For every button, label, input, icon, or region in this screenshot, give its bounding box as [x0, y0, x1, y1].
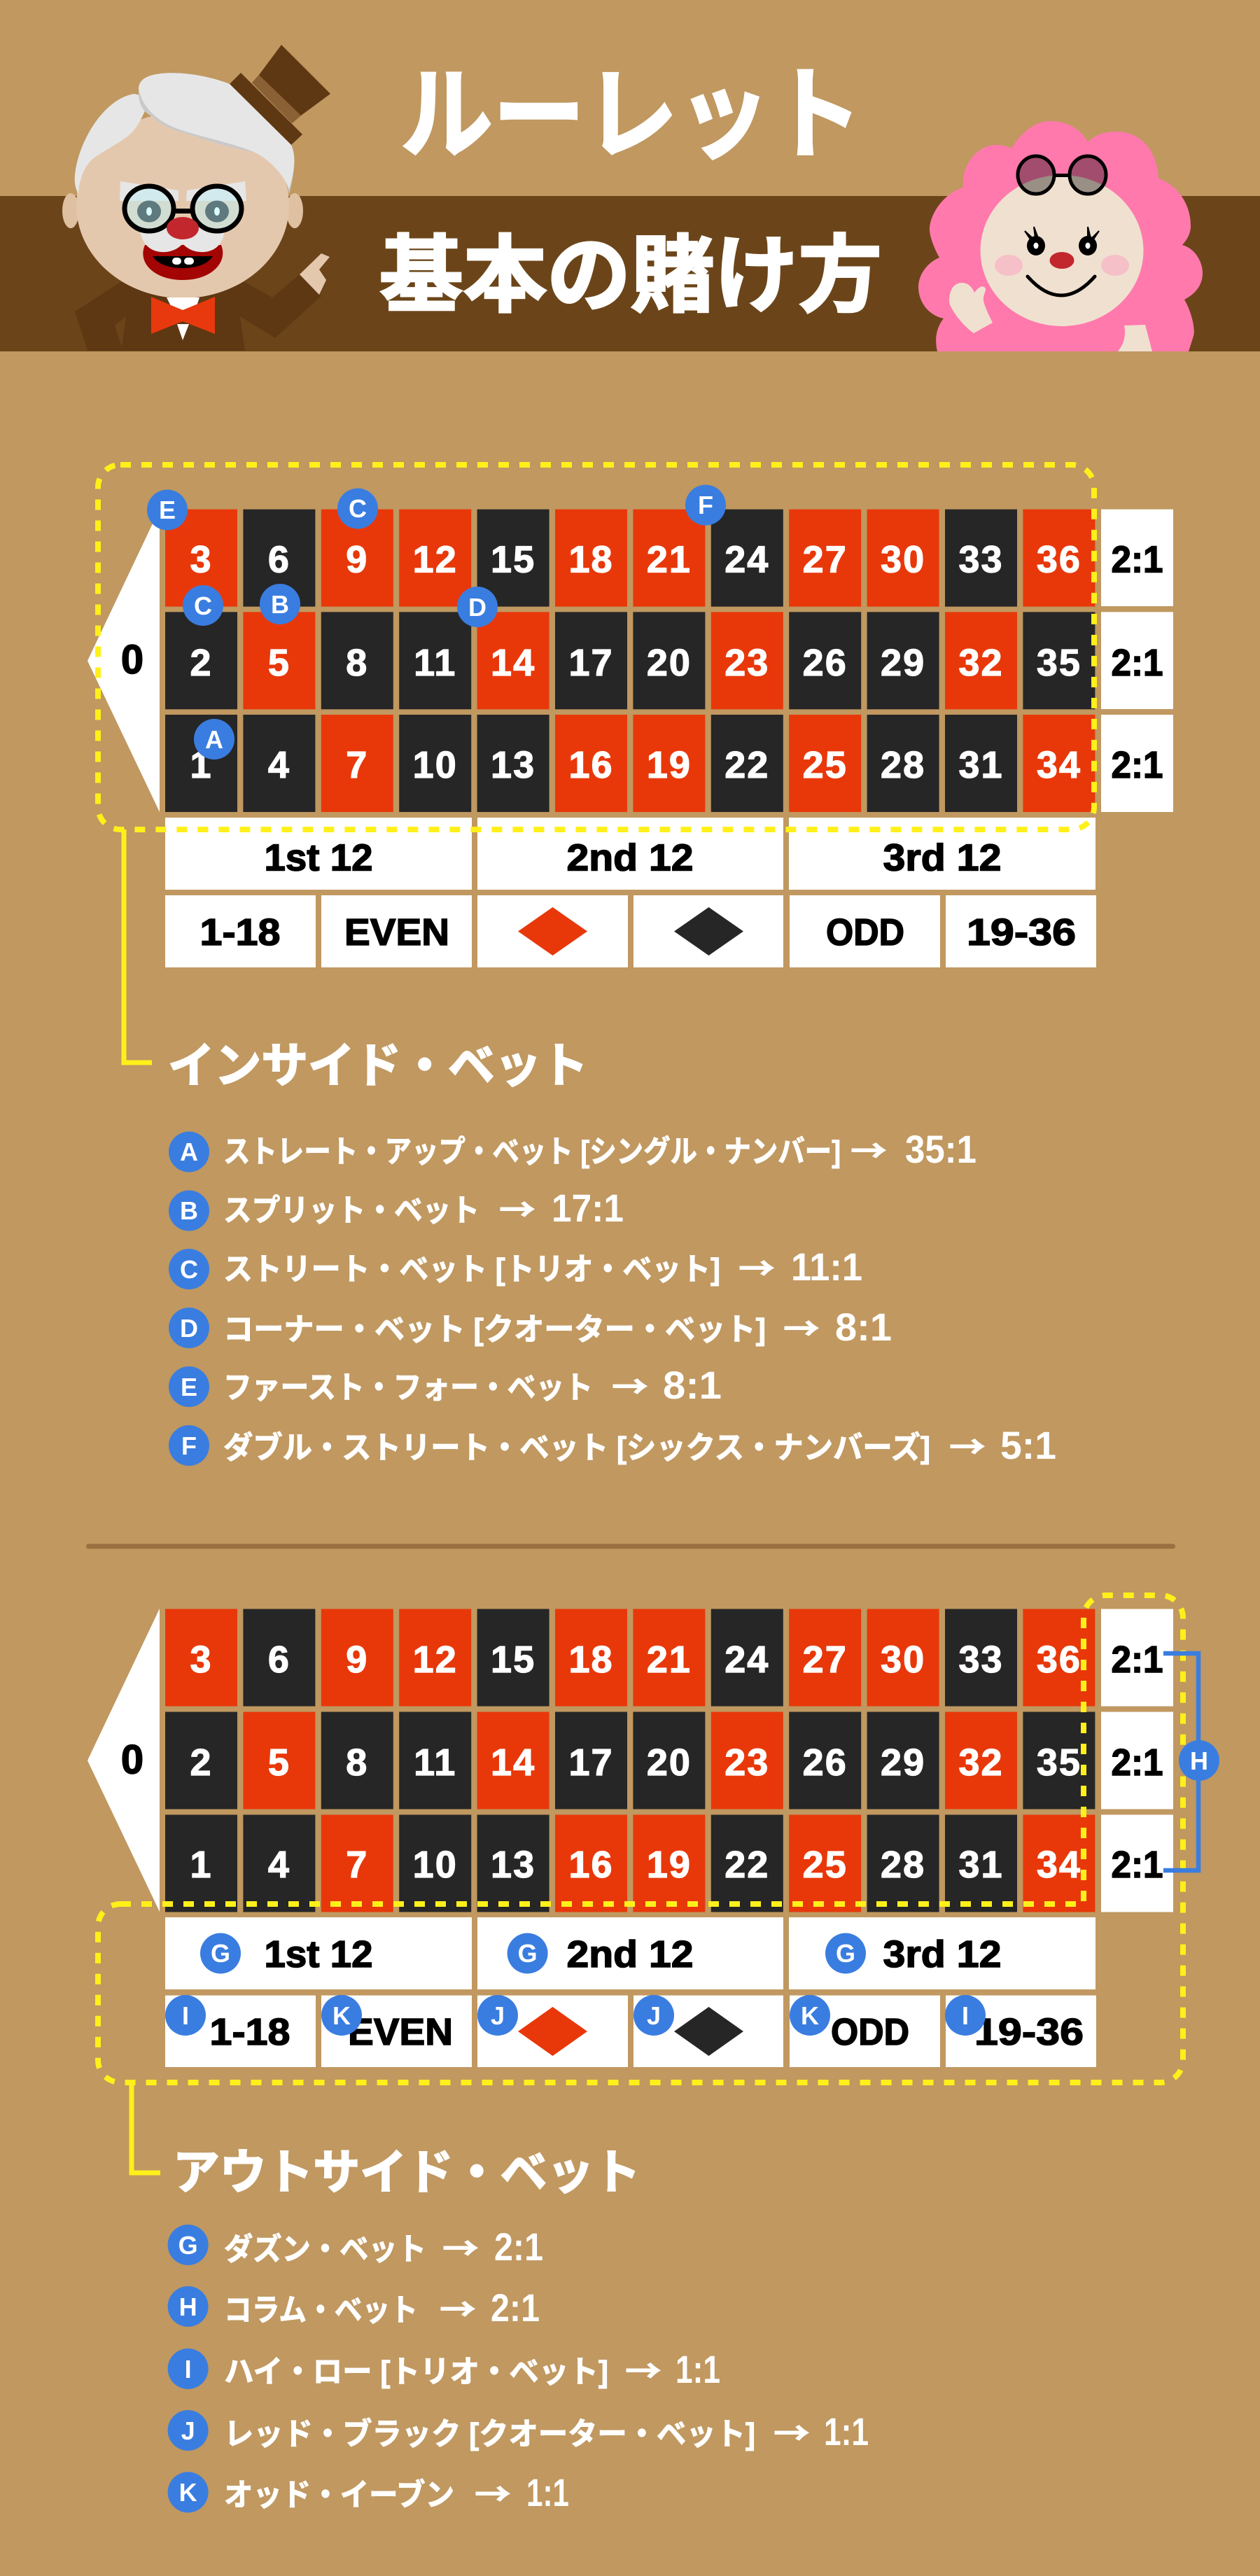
- number grid: 22: [724, 1844, 769, 1886]
- number grid: 28: [881, 1844, 925, 1886]
- connector: outside bets: [132, 2082, 160, 2173]
- number grid: 20: [647, 1742, 692, 1784]
- list: inside bets: ストレート・アップ・ベット [シングル・ナンバー]: [223, 1135, 841, 1169]
- markers on outside table: G: [836, 1939, 855, 1968]
- dozen cells: 3rd 12: [883, 1933, 1001, 1975]
- number grid: 22: [724, 744, 769, 786]
- number grid: 1: [190, 1844, 213, 1886]
- markers on outside table: K: [332, 2001, 351, 2030]
- character: old man with hat: [62, 45, 330, 351]
- list: outside bets: コラム・ベット: [224, 2293, 418, 2328]
- number grid: 9: [346, 539, 368, 581]
- list: outside bets: →: [475, 2470, 511, 2514]
- number grid: 8: [346, 642, 368, 684]
- number grid: 20: [647, 642, 692, 684]
- number grid: 34: [1037, 1844, 1082, 1886]
- number grid: 17: [568, 642, 614, 684]
- number grid: 28: [881, 744, 925, 786]
- title: ルーレット: [400, 59, 862, 172]
- number grid: 19: [647, 1844, 692, 1886]
- number grid: 8: [346, 1742, 368, 1784]
- number grid: 3: [190, 1639, 213, 1681]
- number grid: 29: [881, 1742, 925, 1784]
- number grid: 4: [268, 744, 290, 786]
- number grid: 16: [568, 744, 614, 786]
- even-money cells: EVEN: [348, 2011, 453, 2053]
- list: inside bets: コーナー・ベット [クオーター・ベット]: [223, 1312, 766, 1347]
- list: outside bets: 2:1: [491, 2286, 540, 2330]
- markers on outside table: J: [647, 2001, 661, 2030]
- number grid: 7: [346, 744, 368, 786]
- number grid: 4: [268, 1844, 290, 1886]
- number grid: 25: [803, 744, 848, 786]
- dozen cells: 1st 12: [265, 837, 372, 879]
- number grid: 26: [803, 1742, 848, 1784]
- markers on inside table: E: [159, 496, 176, 524]
- number grid: 6: [268, 539, 290, 581]
- heading: outside bets: アウトサイド・ベット: [173, 2146, 640, 2199]
- list: outside bets: 1:1: [824, 2409, 869, 2454]
- number grid: 12: [413, 539, 458, 581]
- number grid: 32: [958, 642, 1004, 684]
- list: outside bets: H: [179, 2292, 197, 2321]
- list: outside bets: K: [179, 2478, 197, 2507]
- connector: inside bets: [124, 830, 152, 1063]
- column payout cells: [1101, 510, 1173, 812]
- list: outside bets: レッド・ブラック [クオーター・ベット]: [224, 2417, 755, 2451]
- number grid: 13: [491, 1844, 536, 1886]
- markers on inside table: C: [194, 592, 212, 620]
- number grid: 27: [803, 1639, 848, 1681]
- list: inside bets: スプリット・ベット: [223, 1194, 479, 1228]
- markers on outside table: G: [518, 1939, 538, 1968]
- column payout cells: 2:1: [1112, 1844, 1163, 1886]
- number grid: 18: [568, 1639, 614, 1681]
- even-money cells: EVEN: [344, 911, 449, 953]
- dozen cells: [165, 818, 1096, 890]
- list: outside bets: →: [774, 2409, 810, 2454]
- list: inside bets: B: [180, 1196, 198, 1225]
- number grid: 12: [413, 1639, 458, 1681]
- markers on inside table: F: [698, 491, 713, 519]
- number grid: 15: [491, 1639, 536, 1681]
- even-money cells: [165, 895, 1096, 967]
- list: outside bets: 1:1: [676, 2347, 720, 2391]
- number grid: 21: [647, 539, 692, 581]
- dashed outline: outside bets: [98, 1595, 1183, 2082]
- markers on outside table: H: [1190, 1746, 1208, 1775]
- heading: inside bets: インサイド・ベット: [168, 1040, 588, 1093]
- number grid: 10: [413, 744, 458, 786]
- number grid: [165, 1609, 1095, 1912]
- markers on outside table: G: [211, 1939, 230, 1968]
- list: inside bets: 8:1: [663, 1363, 722, 1407]
- zero cell: 0: [121, 1737, 144, 1782]
- number grid: 13: [491, 744, 536, 786]
- markers on outside table: J: [491, 2001, 505, 2030]
- even-money cells: ODD: [826, 911, 904, 953]
- markers on inside table: A: [205, 725, 223, 754]
- number grid: 17: [568, 1742, 614, 1784]
- list: inside bets: ダブル・ストリート・ベット [シックス・ナンバーズ]: [223, 1431, 930, 1465]
- number grid: 36: [1037, 539, 1082, 581]
- number grid: 31: [958, 744, 1004, 786]
- number grid: 16: [568, 1844, 614, 1886]
- number grid: 14: [491, 642, 536, 684]
- list: inside bets: 17:1: [552, 1186, 624, 1230]
- number grid: 10: [413, 1844, 458, 1886]
- list: outside bets: →: [440, 2285, 476, 2330]
- number grid: 23: [724, 1742, 769, 1784]
- list: inside bets: →: [499, 1185, 536, 1230]
- dozen cells: 2nd 12: [567, 1933, 693, 1975]
- markers on inside table: C: [349, 494, 367, 523]
- markers on inside table: [147, 485, 726, 760]
- column payout cells: 2:1: [1112, 539, 1163, 581]
- number grid: 25: [803, 1844, 848, 1886]
- number grid: 24: [724, 1639, 769, 1681]
- panel: inside bet table: [88, 509, 1173, 967]
- column payout cells: [1101, 1609, 1173, 1912]
- list: outside bets: 2:1: [494, 2225, 543, 2269]
- list: outside bets: →: [625, 2346, 662, 2391]
- list: outside bets: ダズン・ベット: [224, 2232, 426, 2267]
- even-money cells: 19-36: [967, 911, 1076, 953]
- list: inside bets: C: [180, 1255, 198, 1284]
- number grid: 32: [958, 1742, 1004, 1784]
- number grid: 23: [724, 642, 769, 684]
- number grid: 30: [881, 539, 925, 581]
- list: outside bets: →: [442, 2224, 479, 2269]
- bracket: column bet: [1163, 1653, 1198, 1870]
- list: outside bets: I: [185, 2355, 192, 2384]
- zero cell: [88, 509, 160, 812]
- number grid: 31: [958, 1844, 1004, 1886]
- number grid: 9: [346, 1639, 368, 1681]
- markers on inside table: B: [271, 590, 289, 619]
- number grid: 6: [268, 1639, 290, 1681]
- number grid: 5: [268, 1742, 290, 1784]
- number grid: 5: [268, 642, 290, 684]
- list: outside bets: J: [181, 2416, 195, 2445]
- number grid: 11: [414, 1742, 456, 1784]
- number grid: 30: [881, 1639, 925, 1681]
- even-money cells: ODD: [831, 2011, 909, 2053]
- number grid: 36: [1037, 1639, 1082, 1681]
- list: inside bets: 8:1: [835, 1305, 892, 1349]
- number grid: 33: [958, 539, 1004, 581]
- list: outside bets: 1:1: [526, 2470, 569, 2514]
- list: inside bets: 35:1: [905, 1127, 976, 1171]
- number grid: 35: [1037, 642, 1082, 684]
- number grid: 27: [803, 539, 848, 581]
- header band: [0, 196, 1260, 351]
- list: inside bets: E: [181, 1373, 197, 1401]
- column payout cells: 2:1: [1112, 744, 1163, 786]
- number grid: 21: [647, 1639, 692, 1681]
- dozen cells: 1st 12: [265, 1933, 372, 1975]
- number grid: 11: [414, 642, 456, 684]
- even-money cells: 1-18: [200, 911, 280, 953]
- number grid: 15: [491, 539, 536, 581]
- list: inside bets: →: [850, 1126, 887, 1171]
- markers on inside table: D: [468, 593, 486, 622]
- markers on outside table: I: [182, 2001, 189, 2030]
- list: outside bets: ハイ・ロー [トリオ・ベット]: [224, 2355, 608, 2389]
- subtitle: 基本の賭け方: [379, 229, 882, 323]
- list: inside bets: [169, 1126, 1056, 1467]
- list: inside bets: ストリート・ベット [トリオ・ベット]: [223, 1252, 720, 1287]
- list: inside bets: 11:1: [791, 1245, 862, 1289]
- number grid: 7: [346, 1844, 368, 1886]
- even-money cells: 1-18: [210, 2011, 290, 2053]
- character: pink-haired woman: [918, 121, 1203, 351]
- number grid: 18: [568, 539, 614, 581]
- list: inside bets: 5:1: [1000, 1423, 1056, 1467]
- panel: outside bet table: [88, 1609, 1173, 2067]
- list: inside bets: D: [180, 1314, 198, 1343]
- number grid: 26: [803, 642, 848, 684]
- dozen cells: 2nd 12: [567, 837, 693, 879]
- list: inside bets: →: [783, 1304, 820, 1349]
- number grid: 24: [724, 539, 769, 581]
- markers on outside table: K: [801, 2001, 819, 2030]
- even-money cells: 19-36: [974, 2011, 1084, 2053]
- markers on outside table: I: [962, 2001, 969, 2030]
- list: outside bets: G: [178, 2231, 198, 2260]
- number grid: 1: [190, 744, 213, 786]
- zero cell: [88, 1609, 160, 1912]
- column payout cells: 2:1: [1112, 642, 1163, 684]
- number grid: 33: [958, 1639, 1004, 1681]
- dozen cells: 3rd 12: [883, 837, 1001, 879]
- list: outside bets: [168, 2224, 869, 2514]
- column payout cells: 2:1: [1112, 1639, 1163, 1681]
- dashed outline: inside bets: [98, 465, 1094, 830]
- number grid: 19: [647, 744, 692, 786]
- list: inside bets: A: [180, 1138, 198, 1166]
- list: inside bets: →: [949, 1422, 986, 1467]
- list: inside bets: ファースト・フォー・ベット: [223, 1371, 593, 1405]
- dozen cells: [165, 1917, 1096, 1989]
- number grid: [165, 510, 1095, 812]
- number grid: 2: [190, 1742, 213, 1784]
- column payout cells: 2:1: [1112, 1742, 1163, 1784]
- list: inside bets: →: [738, 1244, 775, 1289]
- list: inside bets: F: [181, 1432, 197, 1460]
- number grid: 3: [190, 539, 213, 581]
- number grid: 29: [881, 642, 925, 684]
- number grid: 2: [190, 642, 213, 684]
- markers on outside table: [165, 1740, 1219, 2036]
- even-money cells: [165, 1996, 1096, 2067]
- list: outside bets: オッド・イーブン: [224, 2478, 454, 2512]
- number grid: 14: [491, 1742, 536, 1784]
- number grid: 34: [1037, 744, 1082, 786]
- list: inside bets: →: [612, 1362, 648, 1407]
- number grid: 35: [1037, 1742, 1082, 1784]
- zero cell: 0: [121, 637, 144, 682]
